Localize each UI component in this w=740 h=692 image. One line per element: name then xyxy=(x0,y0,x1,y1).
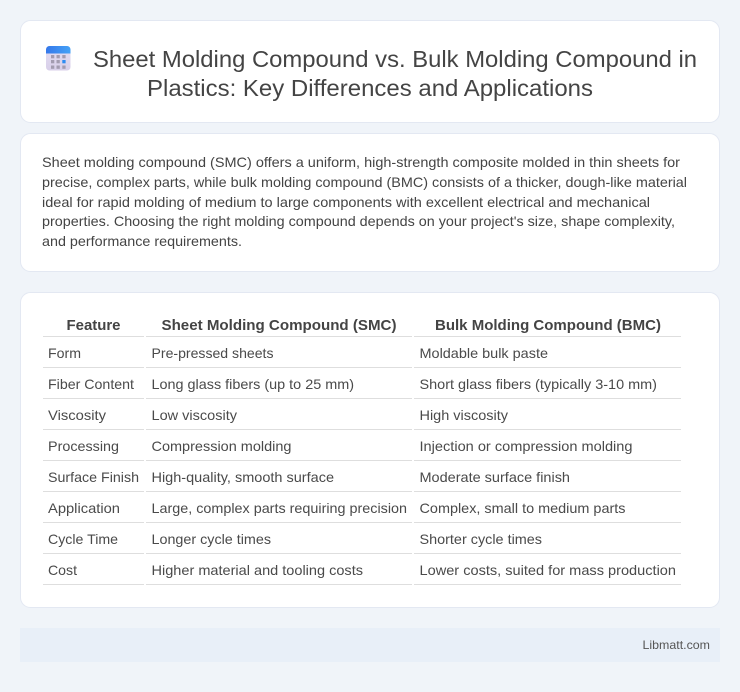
row: processing xyxy=(48,438,632,454)
row: cost: Lower costs, suited for mass production xyxy=(420,562,676,578)
row: cost xyxy=(48,562,676,578)
row: form: Pre-pressed sheets xyxy=(152,345,274,361)
row: viscosity: Low viscosity xyxy=(152,407,237,423)
panel: summary paragraph: precise, complex parts, while bulk molding compound (BMC) consists of a thicker, dough-like material xyxy=(42,174,687,190)
row: viscosity: High viscosity xyxy=(420,407,508,423)
row: processing: Injection or compression molding xyxy=(420,438,632,454)
row: surface finish: High-quality, smooth surface xyxy=(152,469,334,485)
panel: summary paragraph: ideal for rapid molding of medium to large components with excellent electrical and mechanical xyxy=(42,194,650,210)
row: cost: Cost xyxy=(48,562,77,578)
row: application: Complex, small to medium parts xyxy=(420,500,626,516)
row: cycle time: Longer cycle times xyxy=(152,531,271,547)
row: application: Application xyxy=(48,500,120,516)
row: surface finish: Surface Finish xyxy=(48,469,139,485)
panel: summary paragraph: properties. Choosing the right molding compound depends on your project's size, shape complexity, xyxy=(42,213,675,229)
row: viscosity xyxy=(48,407,508,423)
title xyxy=(93,46,697,101)
row: viscosity: Viscosity xyxy=(48,407,106,423)
title: Sheet Molding Compound vs. Bulk Molding Compound in xyxy=(93,46,697,72)
row: cost: Higher material and tooling costs xyxy=(152,562,363,578)
row: surface finish xyxy=(48,469,570,485)
footer xyxy=(20,628,720,662)
row: fiber content: Long glass fibers (up to 25 mm) xyxy=(152,376,354,392)
row: application: Large, complex parts requiring precision xyxy=(152,500,407,516)
row: processing: Compression molding xyxy=(152,438,292,454)
panel: comparison table xyxy=(20,292,720,608)
row: form: Form xyxy=(48,345,81,361)
panel: title header xyxy=(20,20,720,122)
row: cycle time: Cycle Time xyxy=(48,531,118,547)
row: cycle time: Shorter cycle times xyxy=(420,531,542,547)
row: cycle time xyxy=(48,531,542,547)
title: Plastics: Key Differences and Applications xyxy=(147,75,593,101)
table header: Bulk Molding Compound (BMC) xyxy=(435,317,661,334)
row: fiber content: Fiber Content xyxy=(48,376,134,392)
row: application xyxy=(48,500,626,516)
row: fiber content xyxy=(48,376,657,392)
row: form: Moldable bulk paste xyxy=(420,345,548,361)
panel: summary paragraph: Sheet molding compound (SMC) offers a uniform, high-strength composite molded in thin sheets for xyxy=(42,154,680,170)
table header xyxy=(66,317,661,334)
footer: Libmatt.com xyxy=(642,638,710,652)
panel: summary paragraph xyxy=(20,134,720,272)
row: surface finish: Moderate surface finish xyxy=(420,469,570,485)
row: form xyxy=(48,345,548,361)
table header: Sheet Molding Compound (SMC) xyxy=(162,317,396,334)
table header: Feature xyxy=(66,317,120,334)
row: fiber content: Short glass fibers (typically 3-10 mm) xyxy=(420,376,657,392)
row: processing: Processing xyxy=(48,438,119,454)
panel: summary paragraph: and performance requirements. xyxy=(42,233,242,249)
icon: calendar grid xyxy=(46,46,70,70)
